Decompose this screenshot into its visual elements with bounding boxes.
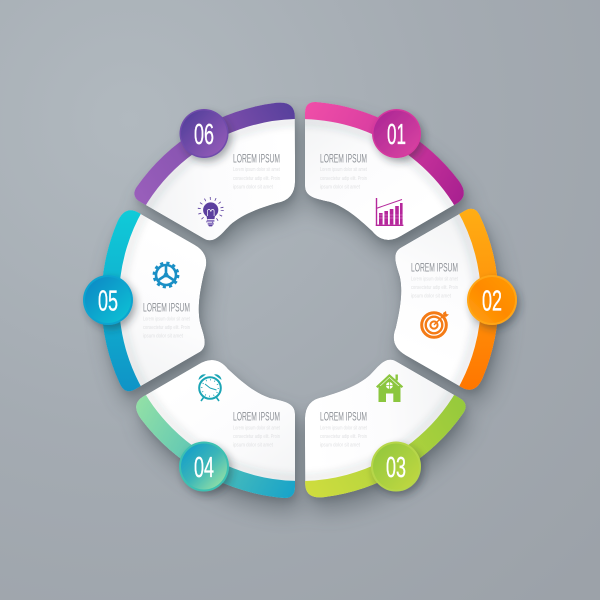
segment shape 05 [103, 210, 206, 392]
text block 01: ipsum dolor sit amet [320, 184, 361, 190]
heading 04: LOREM IPSUM [233, 410, 280, 424]
text block 05: Lorem ipsum dolor sit amet [143, 316, 190, 322]
segment shadows [49, 63, 558, 555]
text block 06: Lorem ipsum dolor sit amet [233, 167, 280, 173]
icon: bar chart [376, 198, 403, 226]
heading 06: LOREM IPSUM [233, 152, 280, 166]
panel: step 01 [305, 102, 464, 240]
text block 01: consectetur adip elit. Proin [320, 176, 367, 182]
heading 03: LOREM IPSUM [320, 410, 367, 424]
text block 05: consectetur adip elit. Proin [143, 325, 190, 331]
icon: alarm clock [198, 374, 222, 401]
panel: step 04 [136, 360, 295, 500]
heading 05: LOREM IPSUM [143, 301, 190, 315]
heading 01: LOREM IPSUM [320, 152, 367, 166]
text block 03: ipsum dolor sit amet [320, 442, 361, 448]
text block 03 [320, 426, 367, 448]
text block 04 [233, 426, 280, 448]
badge 05 [83, 275, 133, 325]
text block 02 [411, 276, 458, 300]
heading 02: LOREM IPSUM [411, 261, 458, 275]
panel: step 05 [82, 210, 206, 392]
text block 04: ipsum dolor sit amet [233, 442, 274, 448]
badge 01 [372, 109, 421, 158]
icon: house [376, 374, 403, 402]
segment shape 06 [134, 102, 295, 240]
badge 04: 04 [194, 452, 214, 484]
badge 05: 05 [98, 286, 118, 318]
segment shape 03 [305, 360, 466, 498]
text block 05: ipsum dolor sit amet [143, 334, 184, 340]
panel: step 06 [134, 102, 295, 240]
text block 06: ipsum dolor sit amet [233, 184, 274, 190]
text block 01 [320, 167, 367, 190]
text block 03: consectetur adip elit. Proin [320, 434, 367, 440]
panel: step 03 [305, 360, 466, 500]
badge 04 [179, 442, 229, 492]
text block 03: Lorem ipsum dolor sit amet [320, 426, 367, 432]
icon: target [422, 311, 449, 337]
text block 05 [143, 316, 190, 340]
badge 06 [180, 109, 228, 158]
text block 02: Lorem ipsum dolor sit amet [411, 276, 458, 282]
text block 04: Lorem ipsum dolor sit amet [233, 426, 280, 432]
segment shape 04 [136, 360, 295, 498]
badge 06: 06 [194, 119, 214, 151]
segment shape 02 [394, 208, 497, 390]
text block 02: ipsum dolor sit amet [411, 294, 452, 300]
badge 02: 02 [482, 286, 502, 318]
icon: light bulb [199, 198, 222, 226]
badge 02 [467, 275, 517, 325]
text block 04: consectetur adip elit. Proin [233, 434, 280, 440]
text block 02: consectetur adip elit. Proin [411, 285, 458, 291]
badge 03: 03 [386, 452, 406, 484]
text block 01: Lorem ipsum dolor sit amet [320, 167, 367, 173]
panel: step 02 [394, 208, 524, 390]
icon: gear [154, 263, 178, 287]
text block 06: consectetur adip elit. Proin [233, 176, 280, 182]
text block 06 [233, 167, 280, 190]
badge 03 [371, 442, 421, 492]
badge 01: 01 [387, 119, 406, 151]
segment shape 01 [305, 102, 464, 240]
